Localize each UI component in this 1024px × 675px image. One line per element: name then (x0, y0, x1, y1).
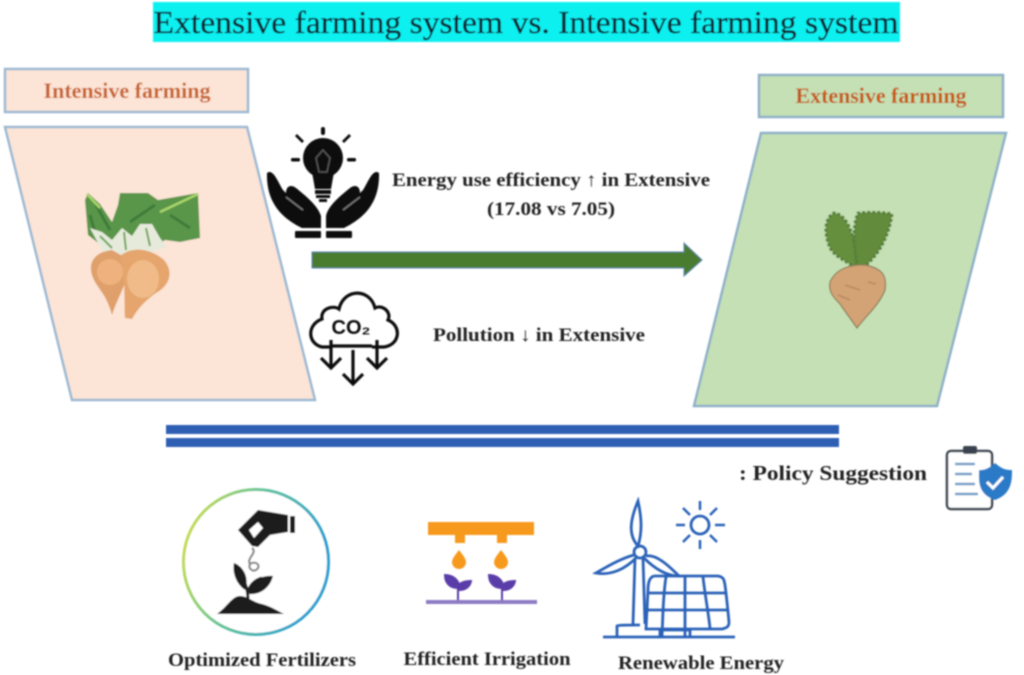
icon: hands holding light bulb (267, 127, 379, 238)
label: optimized fertilizers: Optimized Fertilizers (168, 650, 356, 671)
title: Extensive farming system vs. Intensive farming system (154, 5, 899, 40)
icon: extensive beet (826, 212, 892, 328)
icon: renewable energy wind turbine and solar (596, 501, 735, 637)
divider: double blue bar (166, 425, 839, 447)
icon: intensive sugar beets (85, 193, 200, 319)
icon: CO2 cloud with down arrows (311, 293, 397, 384)
panel: extensive farming label: Extensive farming (796, 83, 966, 108)
panel: intensive farming label: Intensive farming (44, 78, 210, 103)
icon: efficient irrigation (426, 522, 537, 604)
text: policy suggestion: : Policy Suggestion (739, 461, 927, 485)
text: pollution: Pollution ↓ in Extensive (433, 325, 645, 346)
label: efficient irrigation: Efficient Irrigation (404, 649, 571, 670)
text: energy use efficiency: Energy use efficiency ↑ in Extensive (392, 170, 710, 191)
icon: CO2 cloud with down arrows: CO₂ (332, 317, 370, 339)
icon: policy clipboard with shield (947, 446, 1012, 509)
arrow: intensive to extensive (312, 243, 702, 276)
panel: extensive farming field (694, 133, 1006, 406)
panel: extensive farming label (759, 75, 1003, 117)
label: renewable energy: Renewable Energy (618, 653, 785, 674)
text: energy use efficiency: (17.08 vs 7.05) (487, 199, 615, 220)
panel: intensive farming label (5, 69, 248, 112)
icon: optimized fertilizers (184, 490, 328, 634)
text: energy use efficiency (392, 170, 710, 220)
panel: intensive farming field (5, 127, 315, 400)
